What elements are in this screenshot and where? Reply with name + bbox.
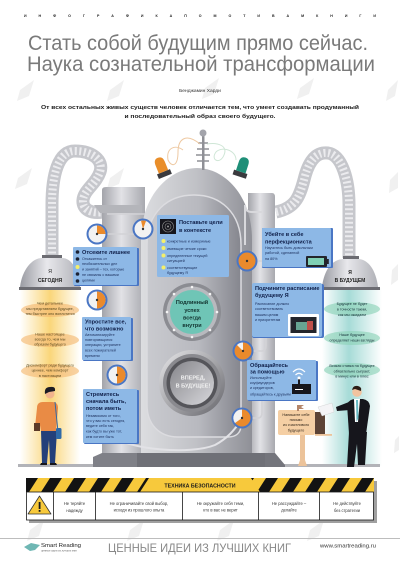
panel: be first: кем хотите быть bbox=[86, 435, 114, 439]
porthole: внутри bbox=[182, 323, 202, 329]
safety table: делайте bbox=[281, 508, 298, 512]
right column bbox=[248, 193, 275, 455]
gauge 2 bbox=[86, 290, 108, 310]
safety table: кто в вас не верит bbox=[203, 508, 238, 512]
panel: be first: Независимо от того, bbox=[86, 414, 121, 418]
top label: И Н Ф О Г Р А Ф И К А П О М О Т И В А М К Н И Г И bbox=[24, 14, 376, 18]
icon: router bbox=[292, 369, 311, 394]
bag bbox=[55, 402, 58, 432]
torso bbox=[37, 402, 58, 431]
panel: schedule: вашим целям bbox=[255, 313, 279, 317]
subtitle bbox=[41, 104, 359, 120]
panel: simplify: Упростите все, bbox=[85, 320, 127, 326]
panel: cut the excess: не связаны с вашими bbox=[82, 273, 119, 277]
text: left column notes: Чем детальнее bbox=[37, 302, 63, 306]
icon: battery bbox=[306, 256, 329, 267]
panel: simplify: что возможно bbox=[85, 326, 124, 332]
panel: ask for help: коуфаундеров bbox=[250, 381, 275, 385]
footer line bbox=[0, 538, 400, 539]
mailbox: из счастливого bbox=[283, 423, 309, 427]
panel: kill the perfectionist bbox=[262, 228, 333, 268]
left column base bbox=[93, 453, 145, 467]
icon: book bbox=[24, 543, 40, 551]
text: left column notes: мы представляем будущее, bbox=[26, 307, 74, 311]
panel: set goals: конкретные и измеримые bbox=[167, 240, 211, 244]
table cells bbox=[26, 492, 374, 520]
icon: calendar grid bbox=[288, 314, 319, 336]
panel: set goals: в контексте bbox=[179, 228, 211, 234]
antenna bbox=[196, 130, 210, 170]
gauge lines bbox=[100, 214, 266, 418]
gauge 6 bbox=[232, 340, 254, 362]
text: right column notes: в минус или в плюс bbox=[335, 374, 369, 378]
panel: cut the excess: целями bbox=[82, 278, 95, 282]
hair and head bbox=[46, 390, 54, 398]
footer slogan: ЦЕННЫЕ ИДЕИ ИЗ ЛУЧШИХ КНИГ bbox=[108, 541, 291, 555]
mailbox: Напишите себе bbox=[282, 413, 310, 417]
panel: ask for help bbox=[247, 360, 318, 401]
panel: kill the perfectionist: работой, сделанной bbox=[265, 251, 299, 255]
base band bbox=[137, 453, 265, 467]
mailbox: будущего bbox=[288, 428, 304, 432]
text: left column notes bbox=[25, 302, 75, 378]
gauge 4 bbox=[132, 218, 154, 240]
porthole: успех bbox=[184, 308, 201, 314]
safety table bbox=[26, 478, 377, 523]
text: right column notes: Будущее не будет bbox=[337, 302, 368, 306]
arms bbox=[35, 408, 41, 427]
safety table: Не окружайте себя теми, bbox=[197, 501, 244, 506]
mailbox bbox=[278, 403, 334, 466]
panel: simplify: повторяющиеся bbox=[85, 338, 112, 342]
subtitle: и последовательный образ своего будущего. bbox=[124, 113, 276, 120]
footer logo: Smart Reading bbox=[41, 543, 81, 549]
shirt and tie bbox=[354, 399, 360, 422]
panel: be first: что у вас есть сегодня, bbox=[86, 419, 125, 423]
safety table: надежду bbox=[66, 508, 84, 513]
panel: simplify: Автоматизируйте bbox=[85, 333, 115, 337]
panel: be first bbox=[83, 389, 139, 444]
figure: man future bbox=[336, 386, 370, 467]
gauge 5 bbox=[236, 250, 258, 272]
text: left column notes: ценнее, чем комфорт bbox=[32, 368, 69, 372]
lamp orange bbox=[151, 155, 172, 179]
left column bbox=[102, 187, 145, 455]
ground bbox=[18, 464, 380, 467]
panel: kill the perfectionist: на 80% bbox=[265, 257, 278, 261]
text: right column notes: обязательно сыграет, bbox=[334, 370, 370, 374]
panel: cut the excess: необязательных дел bbox=[82, 262, 117, 266]
inner panel bbox=[147, 195, 241, 437]
main body bbox=[141, 168, 252, 453]
safety table: Не действуйте bbox=[333, 501, 362, 506]
text: right column notes: определяет наши взгляды bbox=[330, 338, 375, 342]
text: left column notes: образом будущего bbox=[34, 342, 66, 346]
dome: today: СЕГОДНЯ bbox=[38, 278, 63, 284]
panel: set goals: соответствующие bbox=[167, 266, 197, 270]
porthole: Подлинный bbox=[176, 299, 208, 306]
panel: ask for help: и кредиторов, bbox=[250, 386, 274, 390]
title: Стать собой будущим прямо сейчас. bbox=[28, 31, 368, 55]
text: left column notes: всегда то, чем мы bbox=[35, 338, 66, 342]
panel: set goals: ситуацией bbox=[167, 259, 185, 263]
footer logo: ценные идеи из лучших книг bbox=[41, 550, 77, 552]
shoes bbox=[40, 463, 57, 465]
neck brackets bbox=[94, 205, 142, 213]
panel: cut the excess: Откажитесь от bbox=[82, 257, 107, 261]
panel: be first: потом иметь bbox=[86, 406, 122, 412]
text: left column notes: Наше настоящее bbox=[35, 332, 65, 336]
panel: set goals: определенные текущей bbox=[167, 254, 207, 258]
panel: simplify: операции, устраните bbox=[85, 343, 121, 347]
safety table: исходя из прошлого опыта bbox=[114, 508, 165, 512]
panel: kill the perfectionist: перфекциониста bbox=[265, 238, 313, 246]
button: forward to the future: В БУДУЩЕЕ! bbox=[176, 384, 210, 390]
pipe right bbox=[245, 205, 262, 245]
right pipe bbox=[276, 153, 349, 258]
left glow column bbox=[20, 288, 80, 465]
panel: simplify: времени bbox=[85, 354, 100, 358]
text: left column notes: Дискомфорт ради будущего bbox=[26, 364, 74, 368]
pipe left bbox=[108, 422, 240, 450]
dome: today: Я bbox=[48, 269, 52, 275]
panel: be first: ведите себя так, bbox=[86, 424, 114, 428]
icon: target bbox=[160, 219, 176, 234]
tank bbox=[93, 168, 285, 467]
dome: future: Я bbox=[348, 270, 352, 276]
mailbox: письмо bbox=[290, 418, 302, 422]
button: forward to the future bbox=[159, 350, 225, 416]
panel: simplify bbox=[82, 317, 133, 361]
safety table: без стратегии bbox=[334, 508, 360, 513]
gauge 7 bbox=[232, 408, 252, 428]
right glow column bbox=[322, 288, 382, 466]
text: right column notes bbox=[329, 302, 375, 378]
footer logo bbox=[24, 543, 81, 552]
book bbox=[34, 423, 40, 431]
arm bbox=[336, 402, 350, 411]
suit bbox=[347, 399, 370, 434]
safety table: Не рассуждайте – bbox=[272, 501, 307, 506]
text: left column notes: тем быстрее оно воплотится bbox=[25, 312, 75, 316]
text: right column notes: Наше будущее bbox=[339, 333, 365, 337]
icon: warning bbox=[28, 496, 51, 514]
panel: schedule: и приоритетам bbox=[255, 318, 281, 322]
panel: be first: сначала быть, bbox=[86, 398, 126, 405]
head bbox=[352, 387, 362, 397]
text: right column notes: Всякая ставка на будущее bbox=[329, 364, 375, 368]
dome: future: В БУДУЩЕМ bbox=[335, 278, 365, 284]
dome: future bbox=[320, 256, 380, 290]
panel: schedule: Расписание должно bbox=[255, 302, 289, 306]
panel: kill the perfectionist: Научитесь быть довольным bbox=[265, 246, 313, 250]
panel: be first: как будто вы уже тот, bbox=[86, 430, 122, 434]
panel: schedule: будущему Я bbox=[255, 292, 289, 299]
legs bbox=[347, 432, 367, 467]
panel: schedule: соответствовать bbox=[255, 307, 283, 311]
panel: set goals bbox=[157, 215, 229, 277]
safety table: Не теряйте bbox=[64, 501, 86, 506]
subtitle: От всех остальных живых существ человек отличается тем, что умеет создавать продуманный bbox=[41, 104, 359, 111]
panel: ask for help: за помощью bbox=[250, 370, 285, 376]
button: forward to the future: ВПЕРЕД, bbox=[181, 376, 206, 382]
dome: today bbox=[19, 255, 81, 290]
title: Наука сознательной трансформации bbox=[27, 52, 375, 76]
title bbox=[27, 31, 375, 76]
panel: ask for help: Обращайтесь bbox=[250, 362, 289, 369]
porthole bbox=[163, 283, 221, 341]
gauge 3 bbox=[106, 364, 128, 386]
text: right column notes: в точности таким, bbox=[337, 308, 367, 312]
legs bbox=[41, 431, 57, 463]
panel: set goals: будущему Я bbox=[167, 271, 188, 275]
envelope bbox=[318, 403, 334, 416]
heading: ТЕХНИКА БЕЗОПАСНОСТИ bbox=[164, 484, 236, 490]
figure: man today bbox=[34, 387, 62, 465]
panel: set goals: имеющие четкие сроки bbox=[167, 247, 206, 251]
panel: simplify: всех пожирателей bbox=[85, 348, 116, 352]
hazard header bbox=[26, 478, 374, 492]
panel: ask for help: обращайтесь к друзьям bbox=[250, 392, 291, 396]
text: right column notes: как мы ожидаем bbox=[338, 313, 366, 317]
panel: set goals: Поставьте цели bbox=[179, 220, 223, 226]
footer url: www.smartreading.ru bbox=[319, 544, 376, 550]
panel: cut the excess: и занятий – тех, которые bbox=[82, 268, 124, 272]
text: left column notes: в настоящем bbox=[39, 374, 62, 378]
right column base bbox=[250, 453, 285, 467]
safety table: Не ограничивайте свой выбор, bbox=[110, 501, 168, 506]
panel: kill the perfectionist: Убейте в себе bbox=[265, 231, 303, 238]
panel: schedule bbox=[252, 283, 324, 338]
gauge 1 bbox=[86, 224, 108, 244]
panel: ask for help: Используйте bbox=[250, 376, 272, 380]
porthole: всегда bbox=[183, 316, 202, 322]
author: Бенджамин Харди bbox=[179, 88, 221, 94]
left pipe bbox=[52, 151, 103, 258]
panel: cut the excess: Отсеките лишнее bbox=[82, 250, 130, 256]
watermark bbox=[15, 78, 399, 541]
panel: be first: Стремитесь bbox=[86, 392, 120, 398]
panel: cut the excess bbox=[73, 247, 139, 286]
wires bbox=[168, 138, 236, 165]
lamp green bbox=[233, 155, 252, 179]
panel: schedule: Подчините расписание bbox=[255, 286, 320, 292]
